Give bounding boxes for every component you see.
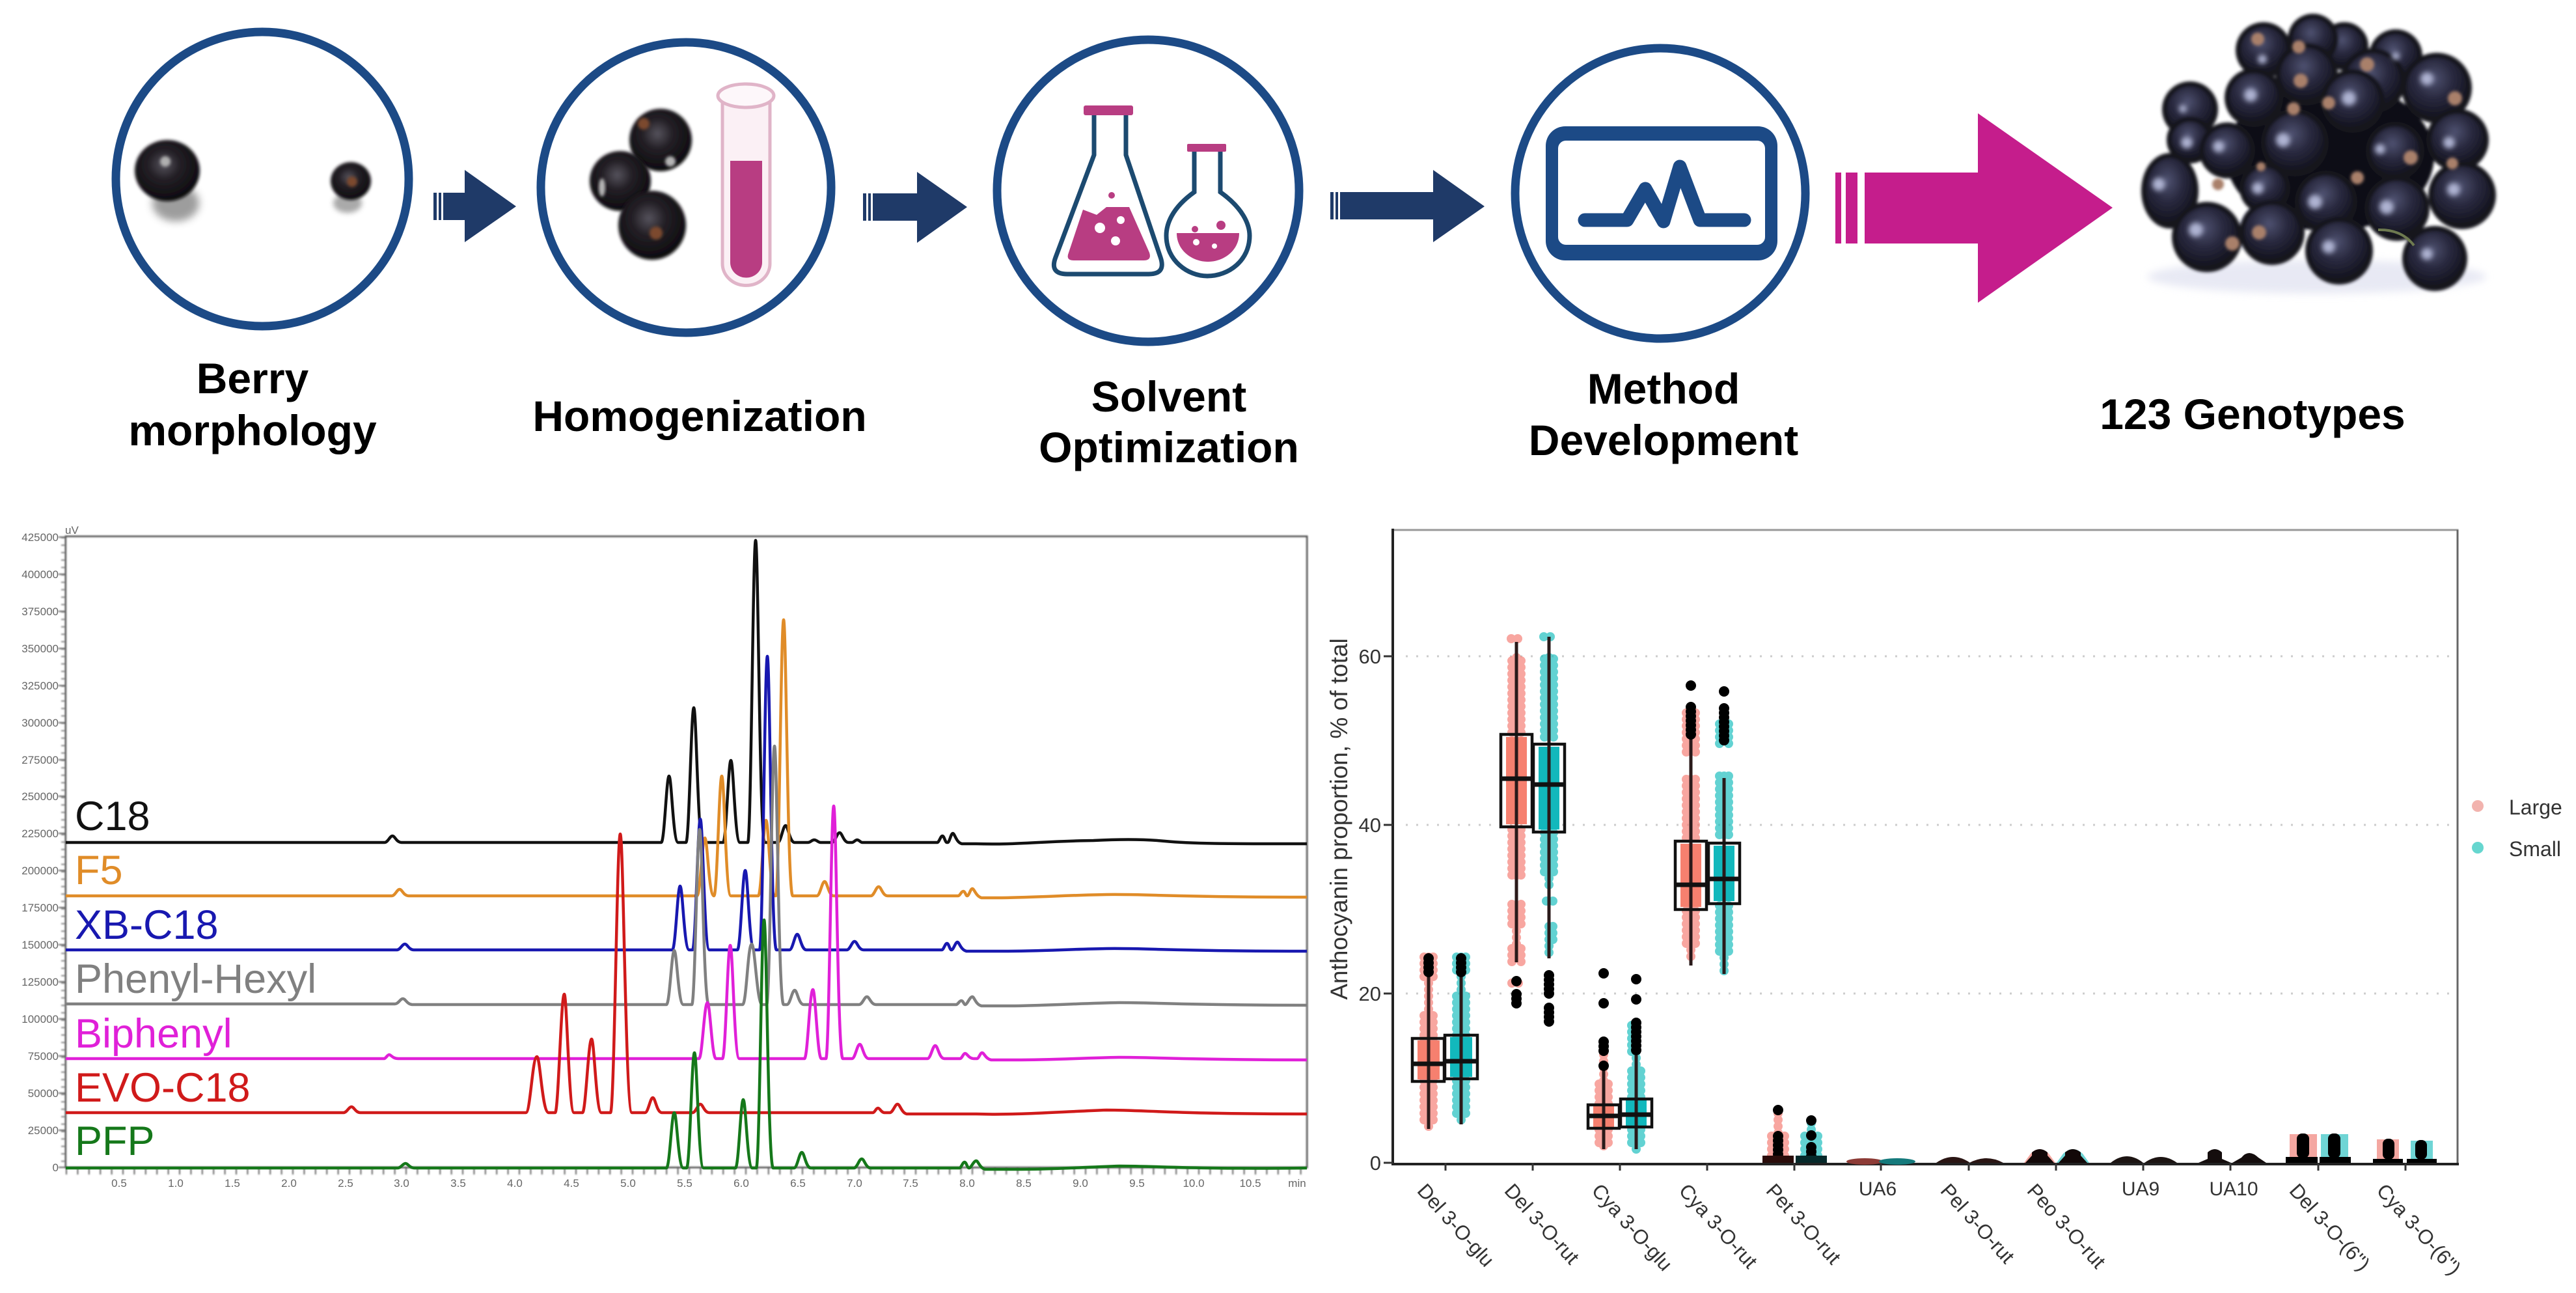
- x tick labels: 6.5: [790, 1177, 806, 1189]
- column labels: PFP: [75, 1119, 155, 1164]
- y axis labels: 0: [1370, 1152, 1381, 1175]
- trace: C18: [66, 540, 1307, 844]
- boxes: Cya 3-O-glu: [1588, 973, 1652, 1151]
- boxes: UA10: [2199, 1149, 2266, 1163]
- x tick labels: min: [1288, 1177, 1306, 1189]
- y axis labels: 40: [1359, 814, 1381, 837]
- y tick labels: 350000: [21, 643, 59, 655]
- x axis category labels: UA10: [2209, 1178, 2258, 1200]
- x axis category labels: UA6: [1859, 1178, 1897, 1200]
- label: Method Development: Method: [1587, 365, 1740, 413]
- boxes: Pet 3-O-rut: [1762, 1110, 1827, 1163]
- label: Homogenization: Homogenization: [532, 392, 867, 440]
- magenta arrow: [1835, 113, 2113, 303]
- y tick labels: 400000: [21, 568, 59, 581]
- arrow 1: [433, 170, 516, 242]
- label: Method Development: Development: [1529, 416, 1798, 464]
- circle: berry sizes: [116, 32, 409, 326]
- legend: [2472, 796, 2562, 861]
- boxes: Del 3-O-glu: [1412, 957, 1477, 1130]
- boxes: Del 3-O-(6''): [2286, 1133, 2351, 1163]
- boxes: Pel 3-O-rut: [1936, 1157, 2003, 1163]
- x axis category labels: Pel 3-O-rut: [1936, 1179, 2020, 1268]
- workflow step: Method Development: [1515, 48, 1805, 464]
- workflow step: Homogenization: [532, 42, 867, 440]
- arrow 2: [863, 172, 967, 243]
- x tick labels: 1.0: [168, 1177, 184, 1189]
- x axis category labels: Del 3-O-(6''): [2285, 1179, 2374, 1275]
- x tick labels: 5.0: [620, 1177, 636, 1189]
- x tick labels: 7.5: [903, 1177, 918, 1189]
- trace: XB-C18: [66, 656, 1307, 951]
- y axis title: Anthocyanin proportion, % of total: [1326, 638, 1352, 1000]
- trace: F5: [66, 620, 1307, 898]
- workflow step: Berry morphology: [116, 32, 409, 454]
- boxes: Cya 3-O-(6''): [2373, 1139, 2437, 1163]
- x axis category labels: Cya 3-O-(6''): [2372, 1179, 2465, 1279]
- y tick labels: 50000: [28, 1087, 59, 1100]
- y tick labels: 0: [53, 1161, 59, 1174]
- x tick labels: 3.5: [450, 1177, 466, 1189]
- y tick labels: 100000: [21, 1013, 59, 1025]
- y axis labels: 20: [1359, 982, 1381, 1005]
- photo: blackcurrant cluster: [2144, 16, 2493, 294]
- x axis category labels: UA9: [2122, 1178, 2159, 1200]
- trace: Biphenyl: [66, 806, 1307, 1060]
- x tick labels: 9.0: [1073, 1177, 1088, 1189]
- x tick labels: 2.5: [338, 1177, 353, 1189]
- trace: EVO-C18: [66, 834, 1307, 1114]
- label: Berry morphology: morphology: [128, 406, 377, 454]
- y tick labels: 225000: [21, 827, 59, 840]
- y tick labels: 275000: [21, 754, 59, 766]
- x tick labels: 3.0: [394, 1177, 409, 1189]
- y tick labels: 75000: [28, 1050, 59, 1063]
- x tick labels: 10.0: [1183, 1177, 1205, 1189]
- x tick labels: 4.5: [564, 1177, 579, 1189]
- trace: PFP: [66, 920, 1307, 1169]
- x tick labels: 7.0: [847, 1177, 862, 1189]
- y tick labels: 250000: [21, 790, 59, 803]
- x axis category labels: Cya 3-O-glu: [1587, 1179, 1677, 1275]
- workflow step: Solvent Optimization: [997, 40, 1299, 471]
- circle: berries and test tube: [541, 42, 831, 333]
- x axis category labels: Del 3-O-glu: [1413, 1179, 1499, 1271]
- arrow 3: [1330, 170, 1485, 242]
- y tick labels: 300000: [21, 717, 59, 729]
- x tick labels: 0.5: [111, 1177, 127, 1189]
- label: Berry morphology: Berry: [197, 354, 308, 402]
- y tick labels: 25000: [28, 1124, 59, 1137]
- label: Solvent Optimization: Optimization: [1039, 423, 1299, 471]
- y tick labels: 375000: [21, 605, 59, 618]
- legend: Large: [2509, 796, 2562, 819]
- boxes: Del 3-O-rut: [1501, 637, 1565, 1022]
- x tick labels: 8.0: [959, 1177, 975, 1189]
- y tick labels: 425000: [21, 531, 59, 544]
- chart: anthocyanin box plots: [1326, 529, 2562, 1279]
- berry highlights: [2152, 52, 2460, 260]
- x tick labels: 1.5: [225, 1177, 240, 1189]
- legend: Small: [2509, 837, 2561, 861]
- x tick labels: 10.5: [1239, 1177, 1261, 1189]
- x axis category labels: Cya 3-O-rut: [1675, 1179, 1762, 1273]
- x axis category labels: Del 3-O-rut: [1500, 1179, 1584, 1269]
- x tick labels: 8.5: [1016, 1177, 1032, 1189]
- trace: Phenyl-Hexyl: [66, 746, 1307, 1006]
- y tick labels: 200000: [21, 865, 59, 877]
- column labels: Phenyl-Hexyl: [75, 956, 316, 1002]
- x tick labels: 5.5: [677, 1177, 692, 1189]
- x axis category labels: Pet 3-O-rut: [1762, 1179, 1846, 1269]
- boxes: UA9: [2111, 1156, 2177, 1163]
- column labels: EVO-C18: [75, 1065, 251, 1111]
- plot frame and gridlines: [1384, 529, 2459, 1171]
- y tick labels: 325000: [21, 680, 59, 692]
- x tick labels: [111, 1177, 1306, 1189]
- y tick labels: [21, 524, 79, 1174]
- y tick labels: 150000: [21, 939, 59, 951]
- chromatogram axes: [59, 536, 1307, 1171]
- label: 123 Genotypes: 123 Genotypes: [2100, 390, 2405, 438]
- x tick labels: 6.0: [733, 1177, 749, 1189]
- circle: chromatogram monitor: [1515, 48, 1805, 339]
- x tick labels: 2.0: [281, 1177, 297, 1189]
- label: Solvent Optimization: Solvent: [1091, 372, 1246, 421]
- y tick labels: 175000: [21, 902, 59, 914]
- column labels: Biphenyl: [75, 1011, 232, 1057]
- column labels: C18: [75, 794, 150, 839]
- circle: flasks: [997, 40, 1299, 342]
- berry calyxes: [2212, 33, 2462, 251]
- y axis labels: 60: [1359, 645, 1381, 668]
- column labels: [75, 794, 316, 1164]
- x axis category labels: [1413, 1178, 2465, 1279]
- y tick labels: uV: [65, 524, 79, 536]
- y axis labels: [1359, 645, 1381, 1175]
- x axis category labels: Peo 3-O-rut: [2023, 1179, 2110, 1273]
- boxes: Peo 3-O-rut: [2024, 1149, 2089, 1163]
- y tick labels: 125000: [21, 976, 59, 988]
- boxes: UA6: [1846, 1158, 1915, 1165]
- boxes: Cya 3-O-rut: [1675, 686, 1740, 977]
- x tick labels: 4.0: [507, 1177, 523, 1189]
- x tick labels: 9.5: [1129, 1177, 1145, 1189]
- column labels: F5: [75, 848, 123, 893]
- column labels: XB-C18: [75, 902, 219, 948]
- chart: chromatograms: [21, 524, 1307, 1189]
